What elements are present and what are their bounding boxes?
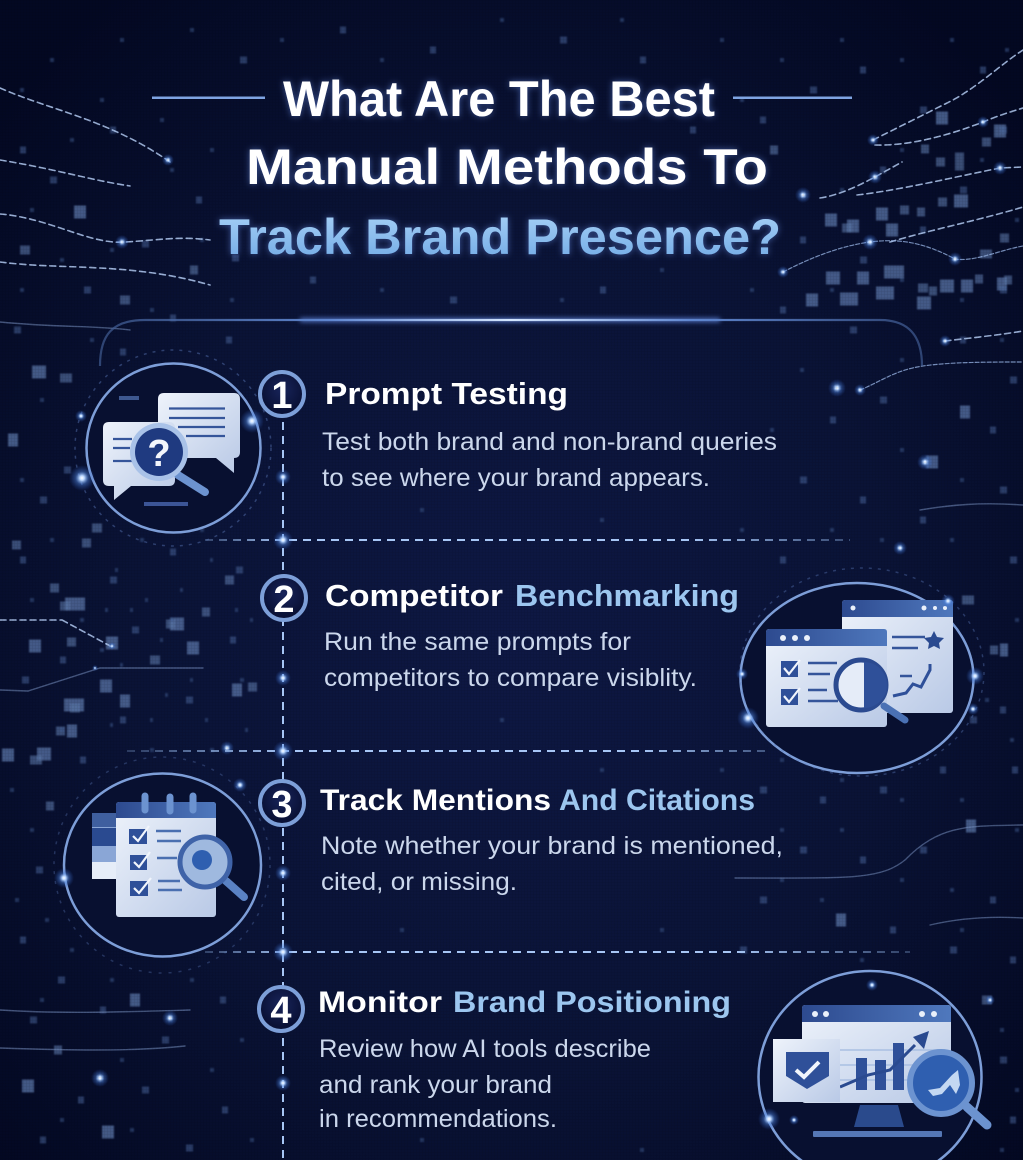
body: monitor brand positioning: and rank your brand [319, 1071, 552, 1099]
number badge 4: 4 [270, 990, 292, 1032]
panel frame top [100, 318, 922, 366]
heading: track mentions and citations [320, 784, 755, 817]
heading: track mentions and citations: And Citations [559, 784, 755, 817]
title [152, 71, 852, 265]
background glow points [91, 116, 1007, 1087]
heading: monitor brand positioning: Brand Positioning [453, 986, 731, 1019]
heading: track mentions and citations: Track Mentions [320, 784, 551, 817]
body: track mentions and citations: cited, or missing. [321, 868, 517, 896]
number badge 2: 2 [273, 579, 295, 621]
body: track mentions and citations [321, 832, 783, 896]
timeline connectors [127, 422, 910, 1160]
heading: prompt testing: Prompt Testing [325, 376, 568, 411]
body: prompt testing: to see where your brand appears. [322, 464, 710, 492]
body: monitor brand positioning [319, 1035, 651, 1133]
step 3 [54, 757, 783, 973]
step 4 [259, 971, 987, 1160]
title line 2: Manual Methods To [246, 139, 768, 195]
body: competitor benchmarking: Run the same prompts for [324, 628, 631, 656]
step 1 [69, 350, 777, 546]
title rule right [733, 96, 852, 99]
number badge 2 [262, 576, 306, 621]
body: monitor brand positioning: Review how AI tools describe [319, 1035, 651, 1063]
title rule left [152, 96, 265, 99]
icon: browser windows with magnifier [736, 568, 984, 776]
heading: monitor brand positioning [318, 986, 731, 1019]
title line 3: Track Brand Presence? [219, 209, 781, 265]
icon: checklist notepad with magnifier [54, 757, 270, 973]
timeline nodes [273, 469, 293, 1091]
body: monitor brand positioning: in recommendations. [319, 1105, 557, 1133]
heading: monitor brand positioning: Monitor [318, 986, 442, 1019]
heading: competitor benchmarking: Competitor [325, 578, 503, 613]
number badge 3 [260, 781, 304, 826]
number badge 1: 1 [271, 375, 293, 417]
number badge 1 [260, 372, 304, 417]
body: prompt testing: Test both brand and non-brand queries [322, 428, 777, 456]
icon: speech bubbles with question magnifier: ? [147, 433, 171, 475]
heading: competitor benchmarking: Benchmarking [515, 578, 739, 613]
title line 1: What Are The Best [283, 71, 715, 127]
body: competitor benchmarking: competitors to compare visiblity. [324, 664, 697, 692]
body: prompt testing [322, 428, 777, 492]
heading: competitor benchmarking [325, 578, 739, 613]
body: competitor benchmarking [324, 628, 697, 692]
icon: speech bubbles with question magnifier [69, 350, 271, 546]
icon: dashboard monitor with shield and magnifier [758, 971, 987, 1160]
number badge 4 [259, 987, 303, 1032]
step 2 [262, 568, 984, 776]
body: track mentions and citations: Note whether your brand is mentioned, [321, 832, 783, 860]
number badge 3: 3 [271, 784, 293, 826]
